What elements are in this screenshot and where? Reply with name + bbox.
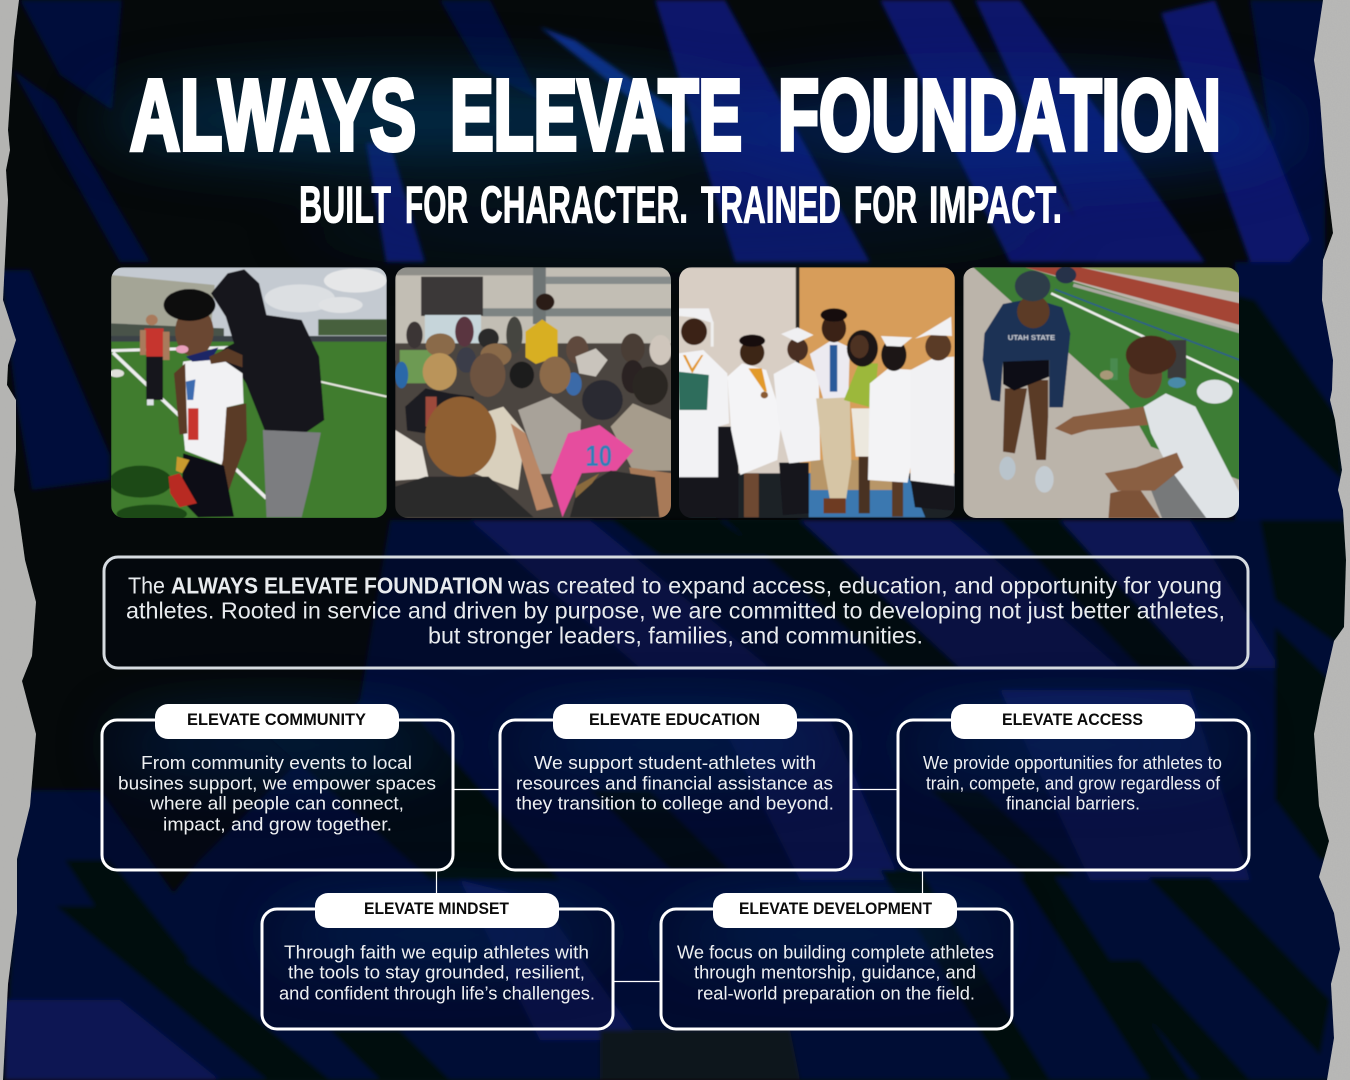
card: elevate community: [102, 704, 453, 870]
subtitle: IMPACT.: [929, 176, 1062, 234]
torn paper edge: right: [1314, 0, 1350, 1080]
intro text panel: was created to expand access, education, and opportunity for young: [507, 572, 1222, 598]
photo: coach with young player on field: [109, 267, 387, 523]
subtitle: FOR: [854, 176, 917, 234]
intro text panel: athletes. Rooted in service and driven by purpose, we are committed to developing not just better athletes,: [126, 598, 1225, 624]
card: elevate access: ELEVATE ACCESS: [1002, 711, 1143, 729]
card: elevate education: resources and financial assistance as: [516, 774, 833, 794]
card: elevate mindset: [262, 893, 613, 1029]
card: elevate education: We support student-athletes with: [534, 753, 816, 773]
card: elevate education: [500, 704, 851, 870]
photo: athletes seated around speaker: 10: [585, 439, 612, 473]
title: ALWAYS: [130, 60, 416, 172]
subtitle: [299, 176, 1062, 234]
card: elevate community: impact, and grow together.: [163, 814, 392, 834]
title: [130, 60, 1221, 172]
lower blue field: [5, 520, 1346, 1080]
title: ELEVATE: [450, 60, 742, 172]
card: elevate mindset: ELEVATE MINDSET: [364, 900, 509, 918]
subtitle: BUILT: [299, 176, 391, 234]
card: elevate access: financial barriers.: [1006, 794, 1140, 814]
card: elevate community: busines support, we empower spaces: [118, 774, 436, 794]
card: elevate education: ELEVATE EDUCATION: [589, 711, 760, 729]
card: elevate community: From community events to local: [141, 753, 412, 773]
card: elevate development: ELEVATE DEVELOPMENT: [739, 900, 932, 918]
card: elevate community: where all people can connect,: [149, 794, 404, 814]
card: elevate mindset: Through faith we equip athletes with: [284, 942, 589, 962]
subtitle: CHARACTER.: [480, 176, 688, 234]
card: elevate mindset: and confident through life’s challenges.: [279, 984, 595, 1004]
intro text panel: [104, 557, 1248, 668]
card: elevate development: real-world preparation on the field.: [697, 984, 975, 1004]
intro text panel: ALWAYS ELEVATE FOUNDATION: [171, 572, 503, 598]
intro text panel: but stronger leaders, families, and communities.: [428, 622, 923, 648]
photo row: [109, 267, 1241, 523]
card: elevate access: We provide opportunities for athletes to: [923, 753, 1222, 773]
card: elevate community: ELEVATE COMMUNITY: [187, 711, 366, 729]
photo: athletes seated around speaker: [395, 267, 673, 520]
subtitle: FOR: [405, 176, 468, 234]
card: elevate development: through mentorship, guidance, and: [694, 962, 976, 982]
connector lines: [436, 790, 922, 982]
photo: coach kneeling with athlete on track: [963, 267, 1241, 519]
subtitle: TRAINED: [701, 176, 841, 234]
card: elevate access: train, compete, and grow regardless of: [926, 774, 1221, 794]
torn paper edge: left: [0, 0, 36, 1080]
card: elevate development: We focus on building complete athletes: [677, 942, 994, 962]
card: elevate access: [898, 704, 1249, 870]
intro text panel: The: [128, 572, 165, 598]
card: elevate mindset: the tools to stay grounded, resilient,: [288, 962, 585, 982]
glows: [100, 80, 1300, 959]
photo: coach kneeling with athlete on track: UTAH STATE: [1008, 333, 1055, 342]
card: elevate education: they transition to college and beyond.: [516, 794, 834, 814]
photo: graduates in white gowns: [678, 267, 956, 518]
card: elevate development: [661, 893, 1012, 1029]
